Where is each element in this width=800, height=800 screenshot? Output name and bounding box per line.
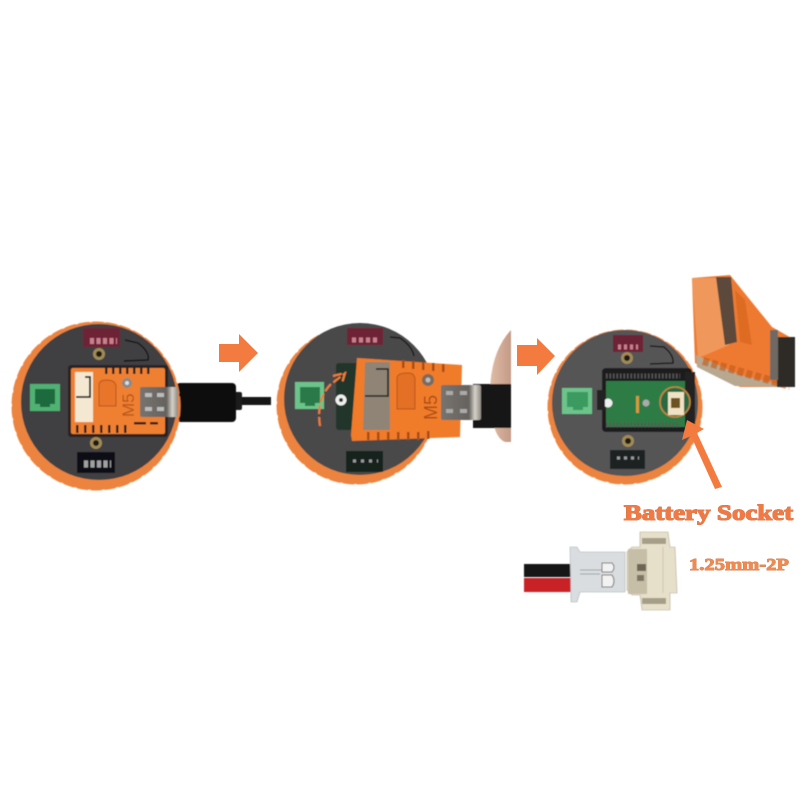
hand [490,330,511,442]
USB cable [473,384,511,428]
arrow: step 2 to 3 [517,338,555,375]
board recess and PCB [597,368,695,432]
orange lift arrow [319,373,345,426]
button outline [390,337,414,356]
lifted orange module [692,275,795,387]
red port A [613,335,643,352]
step 2: module being lifted [277,323,511,484]
orange module [351,358,462,441]
battery connector photo [524,532,677,610]
M5 logo: M5 [119,393,138,417]
arrow: step 1 to 2 [219,334,258,372]
brass hole bottom [622,435,634,447]
orange dial [548,330,702,484]
black port B [77,452,115,473]
button outline [650,346,673,364]
red port A [83,328,120,347]
board under module [336,363,362,430]
dark disc [552,330,698,476]
dark disc [21,324,177,480]
black port B [346,451,383,472]
orange dial [277,326,435,484]
dark disc [284,323,436,475]
step 1: device with module and USB cable [12,322,271,490]
green connector [295,382,324,409]
wires [524,564,572,592]
beige socket [627,532,677,610]
red port A [347,328,383,345]
step 3: exposed board with battery socket [548,275,795,484]
USB cable [176,383,271,422]
button outline [124,340,148,361]
micro USB plug [140,387,178,417]
label: 1.25mm-2P: 1.25mm-2P [689,555,789,574]
brass mounting holes [90,348,105,449]
battery socket with circle highlight [660,387,690,417]
M5 logo: M5 [421,395,441,420]
arrow: pointing to battery socket [682,420,722,489]
black port B [610,450,645,469]
green connector [30,384,60,411]
heading: Battery Socket: Battery Socket [624,500,794,525]
white plug [570,547,625,602]
standoff [336,394,346,406]
brass hole top [621,352,633,364]
orange module [68,365,168,437]
micro USB plug [441,385,481,420]
green connector [562,388,592,414]
orange dial [12,322,180,490]
